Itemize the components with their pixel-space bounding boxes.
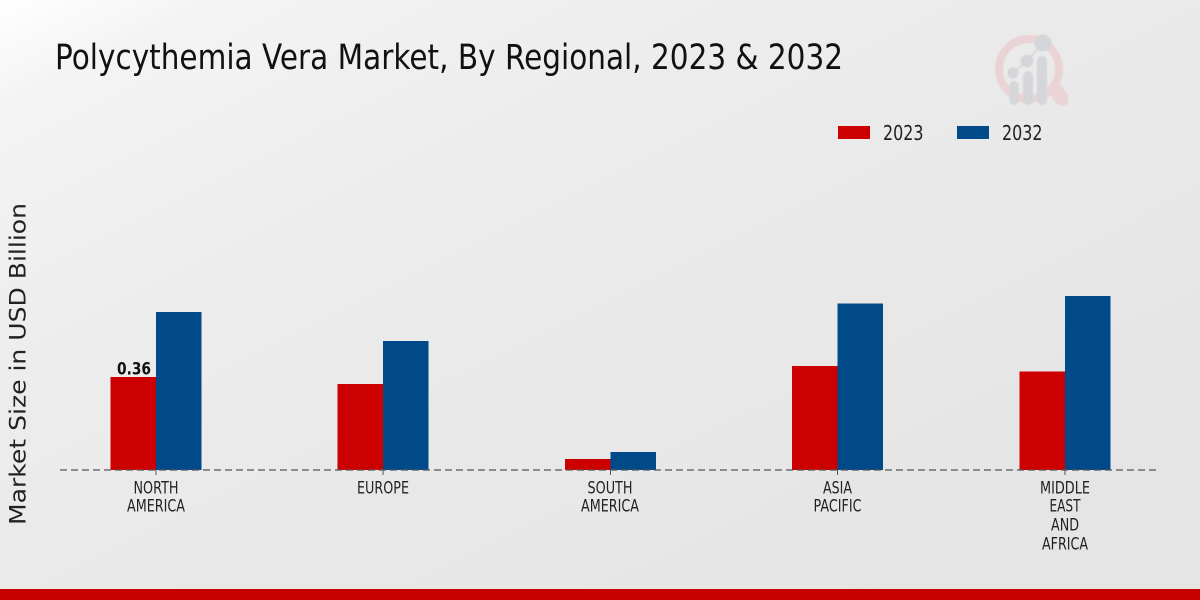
x-axis labels	[127, 478, 1090, 554]
legend	[838, 121, 1042, 145]
x-axis labels: AMERICA	[581, 496, 640, 516]
group: Asia Pacific	[792, 304, 883, 470]
bar chart	[110, 296, 1110, 470]
x-axis baseline	[60, 470, 1159, 475]
x-axis labels: AND	[1051, 516, 1079, 534]
legend item: 2023: 2023	[883, 121, 924, 145]
footer bar	[0, 589, 1200, 600]
group: Europe	[338, 341, 428, 470]
group: North America	[110, 312, 202, 470]
label: South America: SOUTH	[588, 478, 632, 498]
x-axis labels: EAST	[1050, 496, 1081, 516]
x-axis labels: PACIFIC	[814, 496, 862, 516]
icon: watermark logo	[999, 34, 1062, 105]
legend item: 2032	[957, 121, 1042, 145]
label: Asia Pacific: ASIA	[823, 478, 853, 498]
value label: 0.36: 0.36	[117, 360, 151, 380]
x-axis labels: AFRICA	[1042, 534, 1089, 554]
group: Middle East and Africa	[1020, 296, 1110, 470]
y-axis label: Market Size in USD Billion	[6, 203, 32, 525]
group: South America	[565, 452, 656, 470]
legend item: 2023	[838, 121, 924, 145]
legend item: 2032: 2032	[1002, 121, 1042, 145]
label: Europe: EUROPE	[357, 478, 409, 498]
title: Polycythemia Vera Market, By Regional, 2023 & 2032	[55, 38, 843, 78]
label: North America: NORTH	[134, 478, 178, 498]
x-axis labels: AMERICA	[127, 496, 186, 516]
label: Middle East and Africa: MIDDLE	[1040, 478, 1090, 498]
